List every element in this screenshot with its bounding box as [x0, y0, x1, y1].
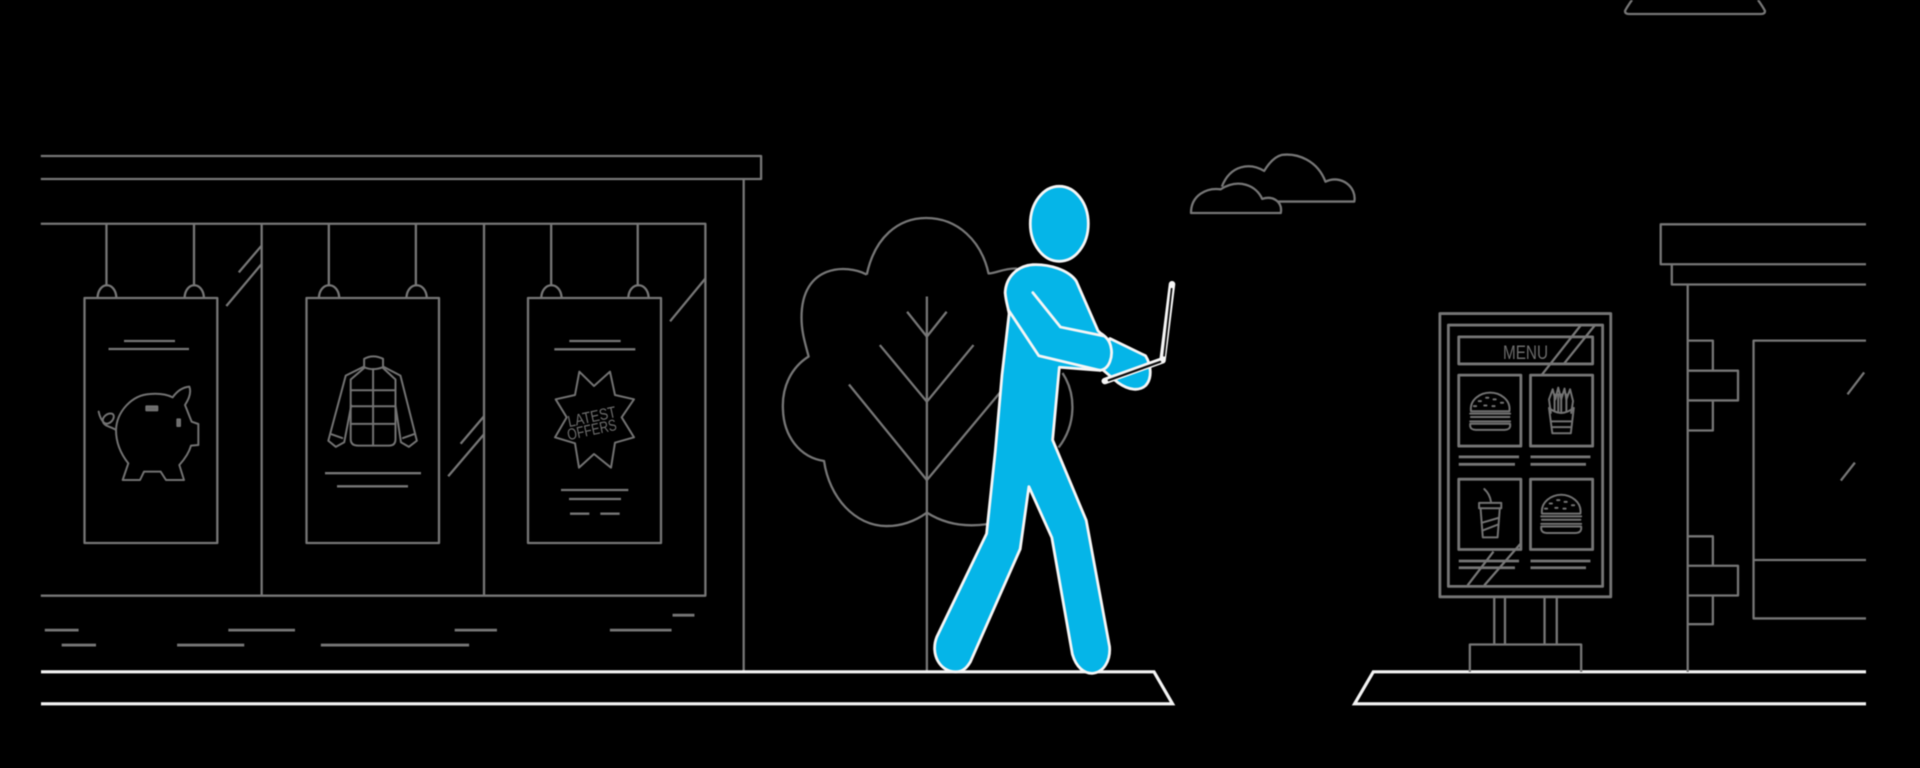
- text: LATEST OFFERS: [566, 404, 618, 444]
- poster: piggy bank: [84, 298, 217, 543]
- panel: menu board: [1440, 314, 1611, 672]
- door hinge top: [1688, 341, 1738, 431]
- panel: right shop front: [1661, 224, 1866, 672]
- icon: piggy bank: [99, 387, 198, 480]
- text: MENU: MENU: [1503, 343, 1548, 364]
- icon: burger bottom: [1541, 495, 1581, 533]
- far hand: [1102, 339, 1150, 389]
- body and legs: [935, 265, 1112, 673]
- icon: clouds: [1191, 155, 1355, 213]
- icon: burger top: [1470, 393, 1510, 430]
- door reflections: [1841, 372, 1864, 481]
- door hinge bottom: [1688, 536, 1738, 624]
- icon: drink cup: [1479, 489, 1501, 537]
- figure: person walking with laptop: [935, 186, 1172, 673]
- head: [1030, 186, 1088, 261]
- ground: left pavement: [41, 672, 1172, 704]
- icon: fries: [1549, 388, 1574, 433]
- icon: lamp shade cropped at top: [1625, 0, 1765, 14]
- poster: latest offers: [528, 298, 661, 543]
- wall: [1687, 285, 1689, 672]
- icon: puffer jacket: [328, 356, 417, 447]
- icon: star burst: [555, 372, 634, 468]
- poster: jacket: [306, 298, 439, 543]
- text: LATEST OFFERS: LATEST: [566, 404, 618, 431]
- laptop: [1105, 284, 1172, 381]
- door: [1754, 341, 1866, 618]
- icon: tree: [783, 218, 1072, 671]
- board frame, stand and cells: [1440, 314, 1611, 672]
- ground: right pavement: [1355, 672, 1866, 704]
- shop building and window frame: [41, 156, 761, 672]
- roof: [1661, 224, 1866, 285]
- panel: left shop front: [41, 156, 761, 672]
- text: LATEST OFFERS: OFFERS: [566, 417, 618, 444]
- arm outlines: [1008, 293, 1103, 370]
